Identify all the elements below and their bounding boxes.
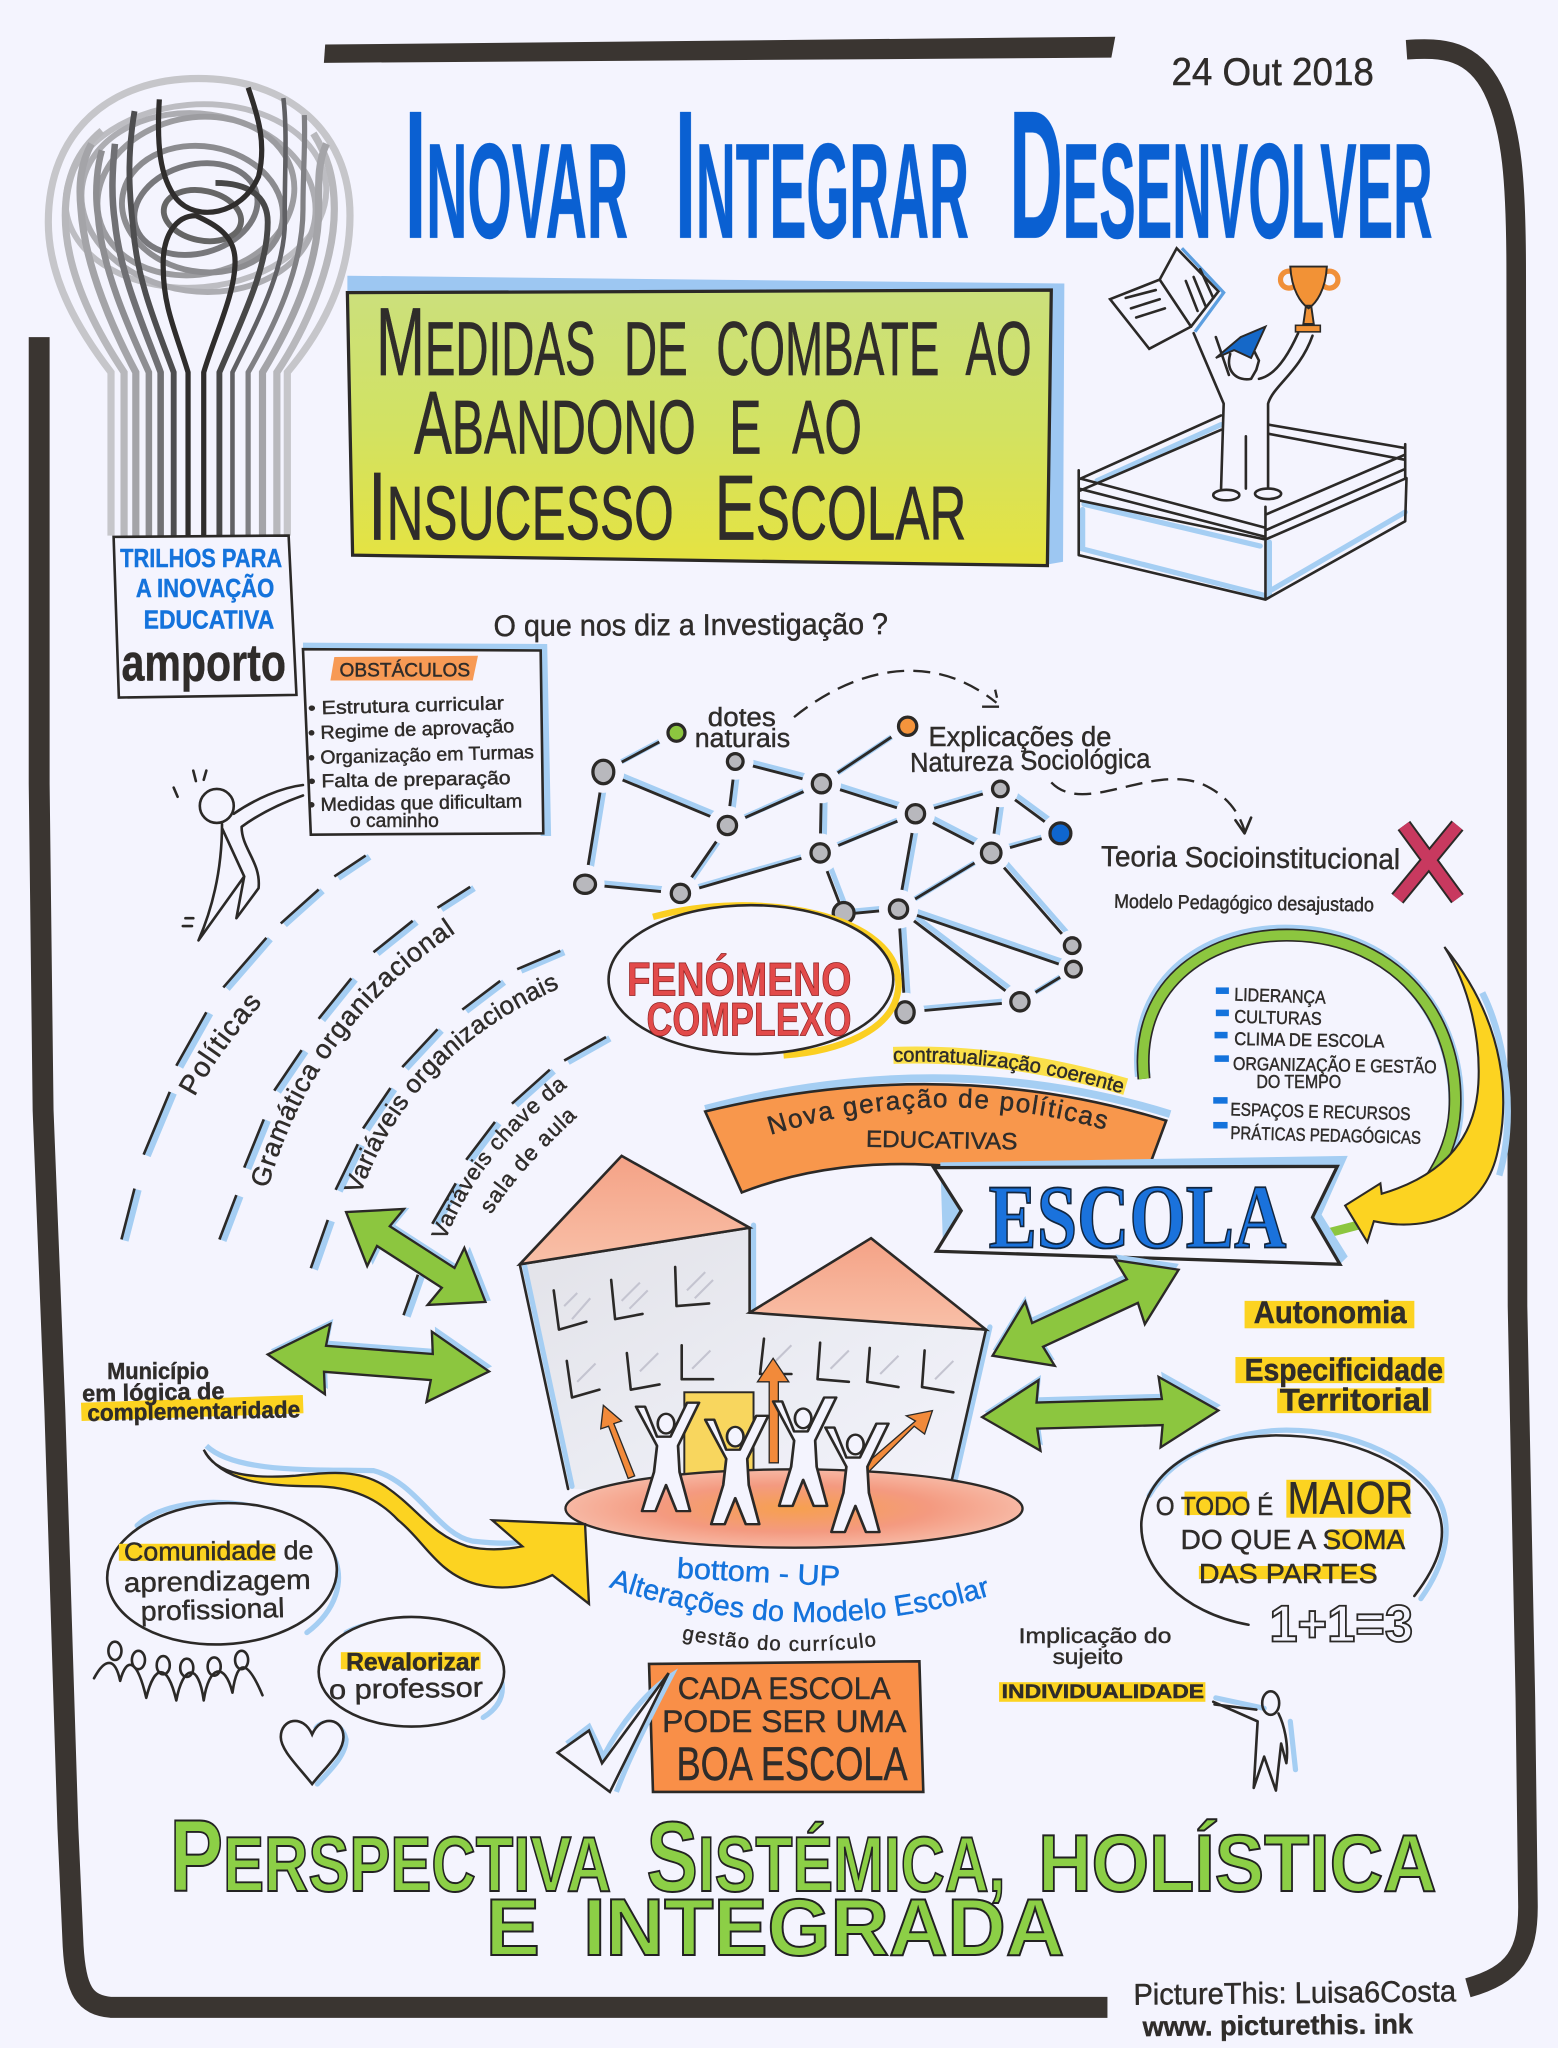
school attributes list: CLIMA DE ESCOLA — [1234, 1028, 1385, 1052]
banner: nova geração de políticas educativas: Nova geração de políticas — [767, 1088, 1108, 1134]
label: autonomia: Autonomia — [1254, 1295, 1407, 1330]
roof right — [750, 1238, 986, 1330]
credits: www. picturethis. ink — [1141, 2008, 1414, 2042]
label: gestão do currículo: gestão do currículo — [682, 1629, 876, 1652]
school attributes list: ESPAÇOS E RECURSOS — [1230, 1098, 1411, 1124]
callout: o todo é maior: O TODO É — [1156, 1491, 1273, 1521]
label: município em lógica de complementaridade — [81, 1358, 303, 1426]
label: bottom-up: bottom - UP — [676, 1553, 841, 1593]
callout: comunidade de aprendizagem: profissional — [140, 1592, 285, 1627]
icon: graduate on podium with book and trophy — [1079, 248, 1407, 600]
icon: group of people — [94, 1642, 262, 1700]
highlight label: contratualização coerente: contratualização coerente — [894, 1048, 1124, 1092]
panel: obstacles — [303, 643, 551, 836]
question: what research says: O que nos diz a Investigação ? — [494, 608, 888, 643]
panel: cada escola pode ser uma boa escola: CADA ESCOLA — [678, 1671, 891, 1706]
rings — [58, 94, 334, 307]
icon: heart — [281, 1721, 346, 1784]
roof left — [520, 1156, 750, 1264]
callout: fenómeno complexo: COMPLEXO — [646, 993, 851, 1046]
arrow: escola to school — [976, 1232, 1196, 1388]
obstacles list: • Falta de preparação — [308, 768, 511, 793]
people cheering — [636, 1398, 888, 1532]
arrow: school to specificity — [981, 1370, 1222, 1452]
banner: nova geração de políticas educativas: EDUCATIVAS — [866, 1126, 1018, 1154]
label: dotes naturais: naturais — [695, 723, 790, 753]
graduate figure — [1194, 327, 1312, 500]
school attributes list: PRÁTICAS PEDAGÓGICAS — [1230, 1122, 1421, 1148]
icon: person pointing — [1213, 1691, 1296, 1791]
panel: main heading box: ABANDONO E AO — [414, 373, 862, 472]
trilhos logo box — [114, 536, 296, 698]
green arch around school attributes — [1142, 932, 1456, 1233]
callout: revalorizar o professor: o professor — [329, 1671, 483, 1705]
obstacles list: • Estrutura curricular — [308, 693, 504, 719]
title: INOVAR — [405, 72, 628, 277]
trilhos logo box: EDUCATIVA — [144, 604, 274, 634]
dashed arrow to explanations — [794, 671, 999, 717]
label: município em lógica de complementaridade: em lógica de — [82, 1378, 225, 1406]
label: individualidade: INDIVIDUALIDADE — [1002, 1681, 1204, 1703]
callout: comunidade de aprendizagem: aprendizagem — [124, 1564, 311, 1598]
panel: cada escola pode ser uma boa escola: PODE SER UMA — [662, 1704, 906, 1739]
closing title — [170, 1799, 1437, 1973]
school attributes list: LIDERANÇA — [1234, 984, 1327, 1008]
trophy — [1280, 267, 1338, 332]
dashed arc: gramática organizacional: Gramática organizacional — [252, 917, 455, 1186]
dashed arc: variáveis organizacionais: Variáveis organizacionais — [344, 977, 558, 1190]
rails — [48, 78, 350, 536]
callout: o todo é maior — [1141, 1430, 1446, 1654]
icon: trilhos lightbulb logo — [48, 78, 350, 536]
school attributes list — [1213, 984, 1437, 1148]
callout: fenómeno complexo: FENÓMENO — [627, 952, 851, 1005]
label: município em lógica de complementaridade: complementaridade — [87, 1396, 300, 1426]
trilhos logo box: A INOVAÇÃO — [136, 573, 274, 603]
label: explicações de natureza sociológica: Explicações de — [929, 721, 1111, 752]
obstacles list: • Organização em Turmas — [308, 742, 534, 769]
label: dotes naturais — [695, 702, 790, 753]
callout: o todo é maior: 1+1=3 — [1269, 1596, 1413, 1654]
banner: escola: ESCOLA — [989, 1166, 1286, 1267]
panel: main heading box: MEDIDAS DE COMBATE AO — [376, 289, 1032, 396]
door — [684, 1392, 754, 1505]
label: especificidade territorial: Especificidade — [1245, 1353, 1443, 1388]
label: explicações de natureza sociológica: Natureza Sociológica — [910, 743, 1151, 778]
obstacles list: • Medidas que dificultam — [308, 791, 522, 816]
icon: stressed person reaching — [174, 771, 303, 940]
obstacles list — [308, 693, 534, 832]
dashed arc: políticas: Políticas — [178, 995, 260, 1096]
date: 24 Out 2018 — [1171, 51, 1374, 94]
callout: o todo é maior: MAIOR — [1288, 1473, 1413, 1524]
label: modelo pedagógico desajustado: Modelo Pedagógico desajustado — [1114, 891, 1374, 916]
yellow curved arrow to escola — [1345, 947, 1508, 1242]
callout: revalorizar o professor — [319, 1617, 504, 1727]
closing title: HOLÍSTICA — [1038, 1818, 1437, 1909]
closing title: SISTÉMICA, — [646, 1802, 1006, 1913]
panel: cada escola pode ser uma boa escola — [649, 1661, 923, 1792]
book — [1110, 248, 1224, 349]
callout: o todo é maior: DAS PARTES — [1199, 1558, 1378, 1589]
label: dotes naturais: dotes — [708, 702, 776, 732]
label: especificidade territorial — [1235, 1353, 1444, 1418]
obstacles label: OBSTÁCULOS — [340, 659, 470, 682]
label: gestão do currículo — [682, 1629, 876, 1652]
label: teoria socioinstitucional: Teoria Socioinstitucional — [1101, 841, 1400, 876]
closing title: PERSPECTIVA — [170, 1799, 611, 1913]
credits — [1133, 1975, 1456, 2042]
icon: check mark — [558, 1673, 671, 1792]
title: INTEGRAR — [675, 72, 969, 277]
panel: main heading box: INSUCESSO ESCOLAR — [368, 453, 966, 560]
dashed arc: políticas — [120, 854, 372, 1242]
label: explicações de natureza sociológica — [910, 721, 1151, 778]
arrow: município to school — [265, 1314, 495, 1407]
dashed arc: variáveis chave de sala de aula — [402, 1036, 612, 1318]
border: left and bottom bar — [39, 337, 1107, 2007]
credits: PictureThis: Luisa6Costa — [1133, 1975, 1456, 2012]
obstacles list: o caminho — [350, 811, 439, 832]
label: município em lógica de complementaridade: Município — [107, 1358, 209, 1384]
callout: o todo é maior: DO QUE A SOMA — [1181, 1524, 1406, 1555]
title — [405, 72, 1433, 277]
callout: fenómeno complexo — [609, 905, 899, 1055]
callout: revalorizar o professor: Revalorizar — [346, 1649, 480, 1676]
label: especificidade territorial: Territorial — [1280, 1383, 1430, 1418]
dashed arc: variáveis organizacionais — [310, 949, 566, 1270]
dashed arc: variáveis chave de sala de aula: Variáveis chave da — [430, 1080, 568, 1236]
callout: comunidade de aprendizagem: Comunidade de — [124, 1535, 313, 1567]
school attributes list: CULTURAS — [1234, 1006, 1322, 1029]
stage oval — [565, 1469, 1023, 1548]
arrow: dashed arcs to school — [328, 1180, 509, 1333]
label: implicação do sujeito — [1019, 1624, 1171, 1669]
dashed arrow to socio-institutional theory — [1051, 779, 1251, 833]
dashed arc: variáveis chave de sala de aula: sala de aula — [482, 1110, 578, 1214]
school attributes list: ORGANIZAÇÃO E GESTÃO — [1233, 1053, 1437, 1077]
podium — [1079, 415, 1407, 600]
label: alterações do modelo escolar: Alterações do Modelo Escolar — [608, 1570, 987, 1622]
panel: main heading box — [347, 276, 1064, 566]
border: top bar — [324, 37, 1115, 63]
border: right bracket — [1407, 49, 1528, 1988]
label: implicação do sujeito: Implicação do — [1019, 1624, 1171, 1648]
trilhos logo box: amporto — [121, 635, 286, 693]
label: implicação do sujeito: sujeito — [1053, 1645, 1123, 1669]
orange arrows — [601, 1358, 932, 1478]
yellow wave arrow to stage — [204, 1446, 589, 1604]
building walls — [520, 1228, 986, 1502]
trilhos logo box: TRILHOS PARA — [120, 543, 282, 573]
dashed arc: gramática organizacional — [218, 886, 476, 1242]
panel: cada escola pode ser uma boa escola: BOA ESCOLA — [676, 1737, 908, 1790]
banner: nova geração de políticas educativas — [703, 1074, 1172, 1194]
school attributes list: DO TEMPO — [1256, 1071, 1341, 1092]
research network — [565, 707, 1089, 1032]
icon: red cross — [1397, 825, 1457, 899]
closing title: E INTEGRADA — [486, 1883, 1064, 1973]
callout: comunidade de aprendizagem — [104, 1497, 340, 1650]
obstacles list: • Regime de aprovação — [308, 716, 515, 744]
school building — [520, 1156, 1023, 1548]
windows — [554, 1267, 953, 1398]
